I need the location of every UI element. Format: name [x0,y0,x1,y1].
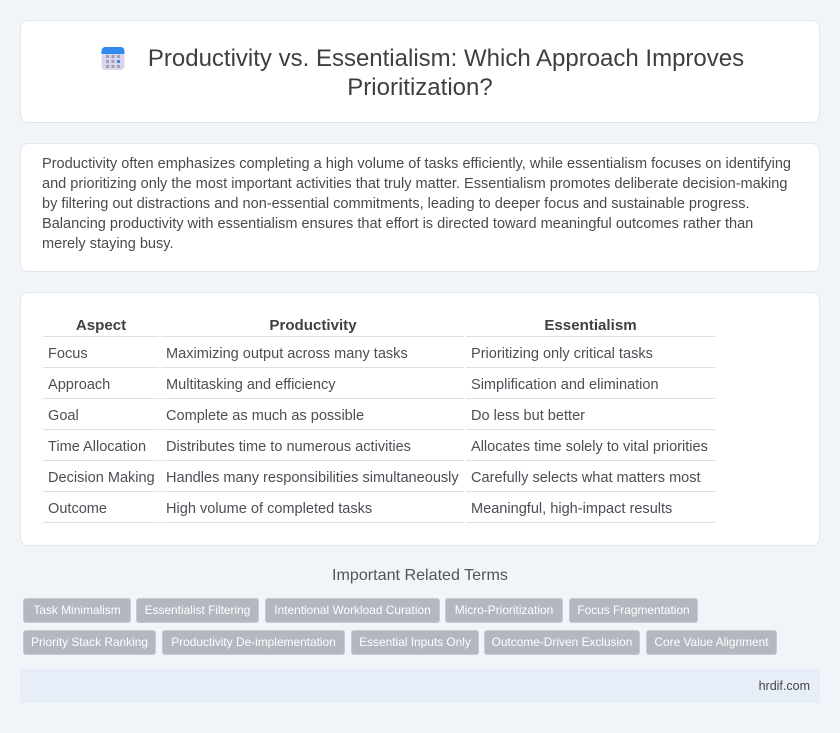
intro text: and prioritizing only the most important activities that truly matter. Essentialism promotes deliberate decision-making [42,176,787,192]
tag: Essentialist Filtering [145,603,250,617]
tags: related terms [23,598,777,655]
tag: Focus Fragmentation [577,603,690,617]
row: Goal: Complete as much as possible [166,408,364,424]
row: Goal: Goal [48,408,79,424]
row: Approach [43,377,715,399]
tag: Intentional Workload Curation [274,603,431,617]
row: Decision Making [43,470,715,492]
row: Time Allocation [43,439,715,461]
tag [23,598,131,623]
intro text: by filtering out distractions and non-essential commitments, leading to deeper focus and sustainable progress. [42,196,750,212]
tag: Outcome-Driven Exclusion [492,635,632,649]
intro text [42,156,791,252]
row: Decision Making: Decision Making [48,470,155,486]
tag [646,630,777,655]
row: Approach: Simplification and elimination [471,377,659,393]
tag [445,598,563,623]
intro text: Balancing productivity with essentialism ensures that effort is directed toward meaningful outcomes rather than [42,216,753,232]
tag: Task Minimalism [33,603,121,617]
row: Outcome: High volume of completed tasks [166,501,372,517]
footer bar [20,669,820,703]
panel: comparison table [20,292,820,546]
intro text: Productivity often emphasizes completing a high volume of tasks efficiently, while essentialism focuses on identifying [42,156,791,172]
tag: Productivity De-implementation [171,635,336,649]
table header: Productivity [269,317,357,334]
icon: calendar [102,47,124,70]
tag [569,598,698,623]
row: Time Allocation: Distributes time to numerous activities [166,439,411,455]
row: Focus [43,346,715,368]
tag [265,598,440,623]
row: Decision Making: Handles many responsibilities simultaneously [166,470,459,486]
tag [162,630,345,655]
tag: Core Value Alignment [654,635,769,649]
tag [484,630,640,655]
row: Decision Making: Carefully selects what matters most [471,470,701,486]
row: Approach: Multitasking and efficiency [166,377,336,393]
row: Goal [43,408,715,430]
title: Productivity vs. Essentialism: Which Approach Improves [148,45,744,72]
panel: title header [20,20,820,123]
row: Approach: Approach [48,377,110,393]
row: Focus: Focus [48,346,88,362]
title [148,45,744,101]
tag: Priority Stack Ranking [31,635,148,649]
tag [351,630,479,655]
row: Time Allocation: Time Allocation [48,439,146,455]
panel: introduction [20,143,820,272]
tag [23,630,156,655]
table header [43,317,715,337]
row: Focus: Prioritizing only critical tasks [471,346,653,362]
footer source: hrdif.com [759,679,810,693]
row: Focus: Maximizing output across many tasks [166,346,408,362]
intro text: merely staying busy. [42,236,174,252]
title: Prioritization? [347,74,493,101]
heading: related terms: Important Related Terms [332,566,508,584]
table header: Essentialism [544,317,637,334]
tag: Micro-Prioritization [455,603,553,617]
row: Outcome: Outcome [48,501,107,517]
row: Goal: Do less but better [471,408,585,424]
table header: Aspect [76,317,126,334]
row: Outcome [43,501,715,523]
tag [136,598,259,623]
row: Outcome: Meaningful, high-impact results [471,501,672,517]
tag: Essential Inputs Only [359,635,471,649]
row: Time Allocation: Allocates time solely to vital priorities [471,439,708,455]
